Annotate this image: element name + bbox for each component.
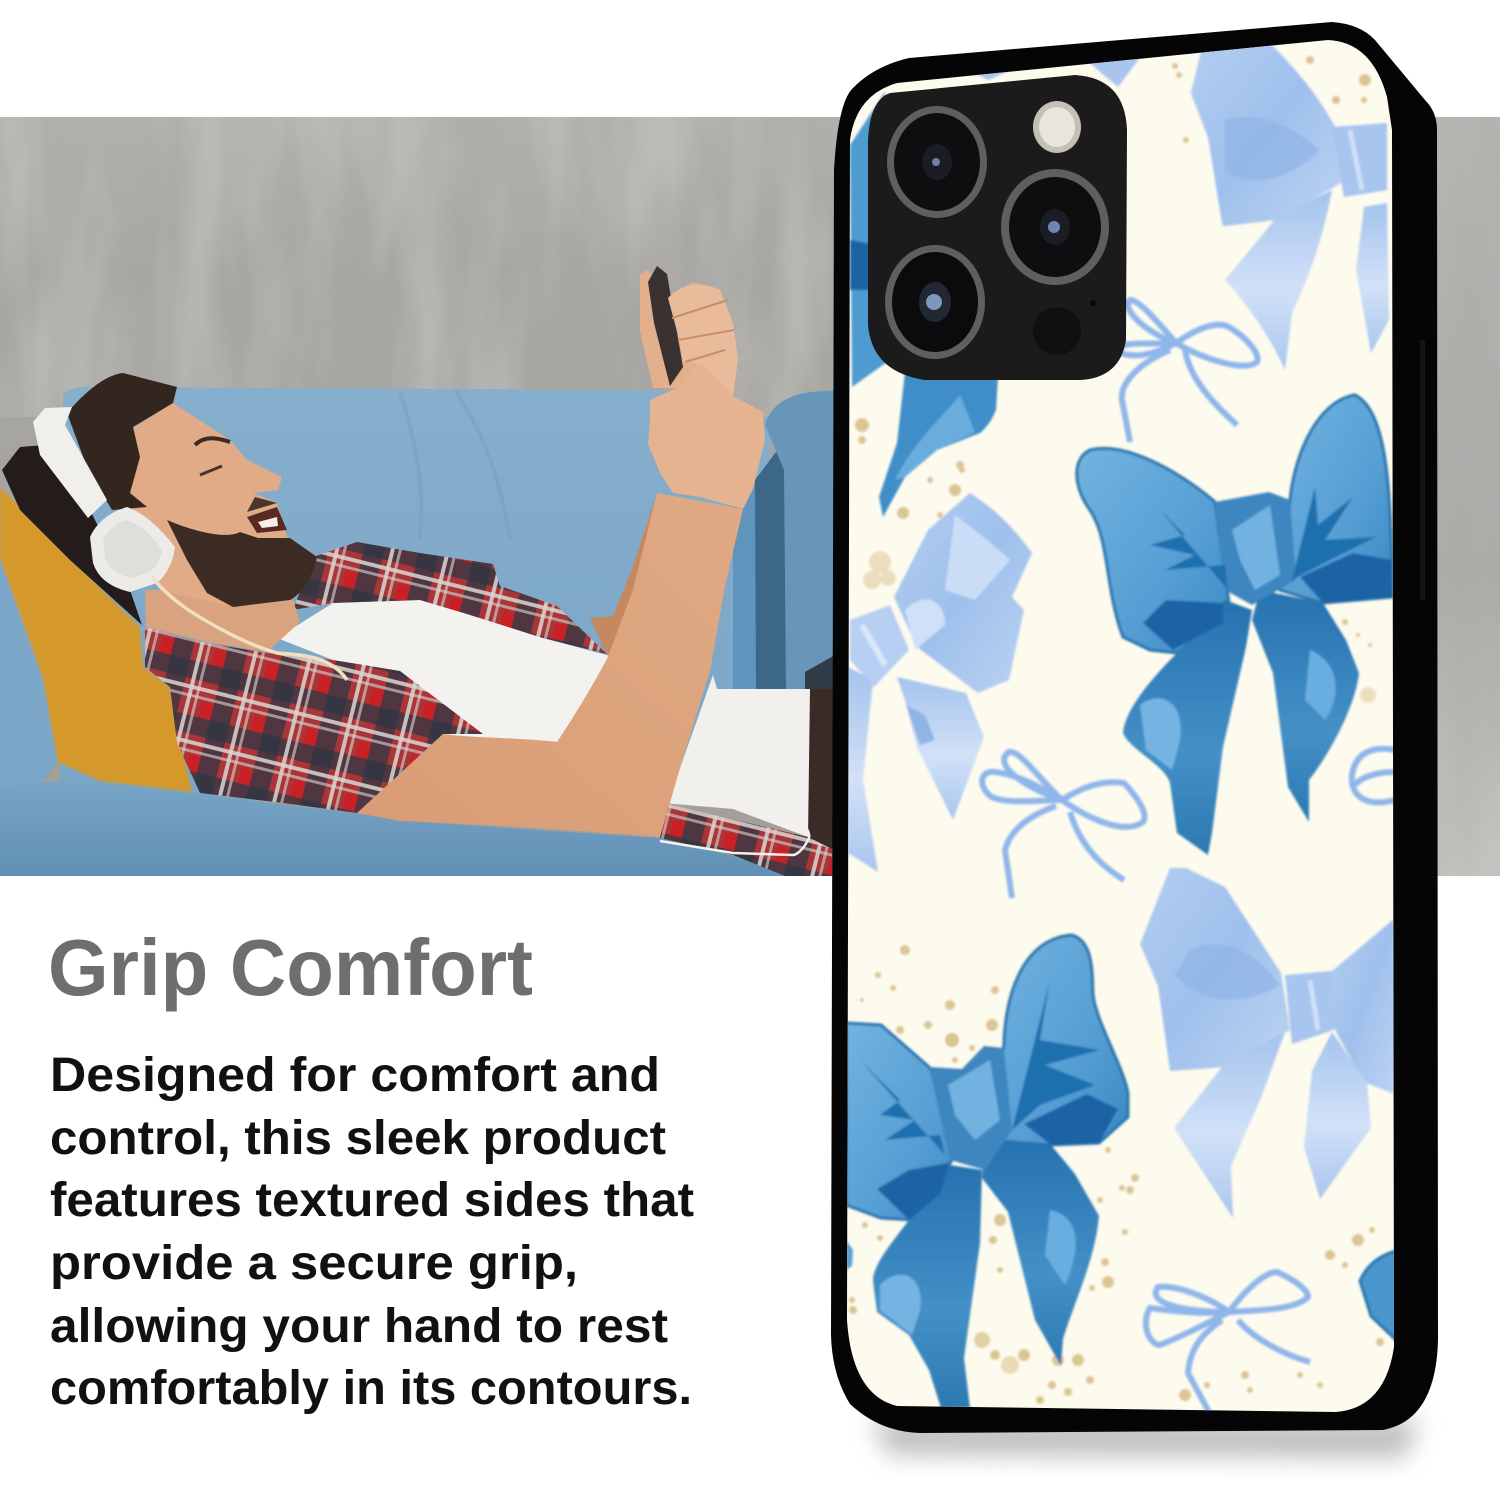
wall background: [0, 117, 860, 876]
dark bow centre: [1077, 395, 1392, 855]
lower shirt tail: [660, 803, 832, 876]
earphone cable: [152, 577, 347, 680]
mouth: [247, 507, 287, 533]
body description text: features textured sides that: [50, 1174, 694, 1227]
dark sofa seam: [755, 440, 786, 692]
shadow near phone: [805, 656, 833, 689]
blue sofa: [0, 387, 840, 876]
cushion folds: [400, 390, 510, 540]
body description text: comfortably in its contours.: [50, 1362, 692, 1415]
gold speckles: [849, 56, 1384, 1404]
plaid shirt sleeve: [145, 627, 483, 813]
far forearm: [590, 493, 657, 655]
dark hair behind head: [2, 445, 142, 625]
sofa arm: [765, 390, 840, 692]
finger lines: [672, 300, 734, 362]
body description text: control, this sleek product: [50, 1112, 666, 1165]
body description text: [50, 1049, 694, 1415]
ribbon bow middle: [982, 752, 1144, 898]
teeth: [258, 517, 278, 528]
flash: [1033, 101, 1081, 153]
inner arm panel: [733, 482, 756, 689]
plaid shirt upper: [293, 542, 607, 654]
microphone: [1090, 300, 1096, 306]
right wall strip: [1430, 117, 1500, 876]
light bow top right: [1194, 43, 1389, 370]
man lying on sofa: [2, 266, 836, 876]
face: [130, 403, 317, 607]
headphones: [33, 407, 175, 592]
light bow left: [848, 493, 1032, 872]
body description text: Designed for comfort and: [50, 1049, 660, 1102]
trousers: [806, 689, 836, 849]
side button strip: [1420, 340, 1425, 600]
dark bow fragment left: [846, 1240, 853, 1270]
body description text: provide a secure grip,: [50, 1237, 578, 1290]
left sofa back: [0, 560, 58, 788]
lower lens: [885, 245, 985, 359]
fingers over phone: [668, 285, 738, 396]
dark bow lower left: [846, 935, 1128, 1408]
yellow pillow: [0, 487, 192, 792]
white t-shirt right part: [663, 675, 810, 837]
upper lens: [887, 106, 987, 218]
near arm: [357, 493, 743, 837]
eye: [200, 466, 222, 475]
body description text: allowing your hand to rest: [50, 1300, 668, 1353]
white cable loop: [660, 828, 810, 856]
fist: [648, 363, 765, 509]
beard: [167, 520, 317, 607]
black case body: [831, 22, 1438, 1433]
sofa seat: [0, 780, 790, 876]
dark bow fragment right: [1360, 1251, 1396, 1340]
lidar sensor: [1033, 307, 1081, 355]
heading: Grip Comfort: Grip Comfort: [48, 923, 533, 1012]
eyebrow: [195, 438, 230, 445]
moustache: [247, 497, 277, 512]
white t-shirt chest: [277, 600, 610, 745]
ribbon bow lower: [1146, 1272, 1310, 1412]
backrest cushion: [60, 387, 775, 800]
neck: [145, 590, 300, 652]
lifestyle photo band: [0, 117, 1500, 876]
phone in hand: [648, 266, 683, 386]
dark bow top left fragment: [850, 92, 998, 517]
watercolor artwork: [846, 43, 1396, 1412]
camera island: [868, 75, 1127, 380]
ribbon bow right edge: [1352, 749, 1395, 802]
hand behind phone: [640, 270, 738, 396]
top hair: [67, 373, 177, 510]
drop shadow: [870, 1420, 1420, 1458]
right lens: [1001, 169, 1109, 285]
small top bow fragments: [968, 55, 1142, 87]
light bow lower right: [1140, 868, 1394, 1218]
phone case product: [831, 22, 1438, 1458]
ribbon bow upper: [1115, 300, 1258, 442]
printed back panel: [840, 30, 1400, 1420]
